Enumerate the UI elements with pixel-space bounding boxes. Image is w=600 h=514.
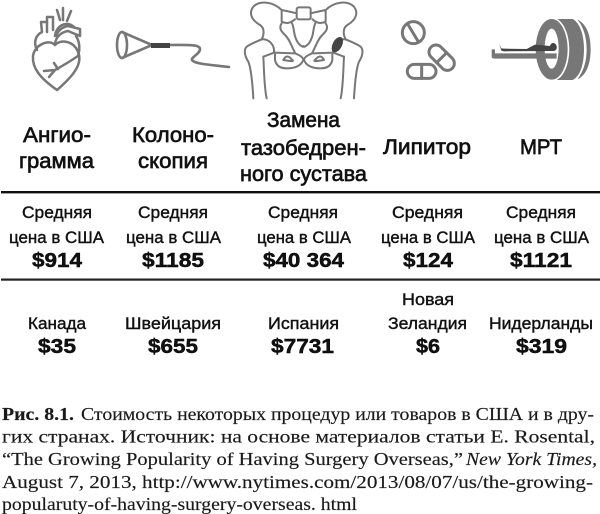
caption: Стоимость некоторых процедур или товаров в США и в дру-: [81, 404, 594, 424]
icon: heart: [33, 8, 80, 90]
US price: MRI: $1121: [510, 249, 572, 272]
US price: MRI: цена в США: [494, 229, 589, 247]
icon: pills: [402, 22, 457, 78]
US price: colonoscopy: [126, 204, 221, 272]
US price: hip replacement: Средняя: [268, 204, 338, 222]
caption: “The Growing Popularity of Having Surgery Overseas,”: [2, 449, 463, 469]
foreign price: Canada: Канада: [28, 315, 87, 333]
foreign price: Spain: $7731: [271, 335, 334, 358]
US price: lipitor: Средняя: [392, 204, 463, 222]
heading: angiogram: Ангио-: [23, 124, 91, 147]
foreign price: Netherlands: [489, 315, 593, 358]
caption: гих странах. Источник: на основе материалов статьи E. Rosental,: [2, 426, 595, 446]
US price: colonoscopy: $1185: [142, 249, 204, 272]
foreign price: Switzerland: Швейцария: [125, 315, 221, 333]
US price: colonoscopy: цена в США: [126, 229, 221, 247]
US price: lipitor: цена в США: [381, 229, 475, 247]
icon: colonoscope: [117, 32, 229, 67]
heading: colonoscopy: Колоно-: [132, 124, 214, 147]
heading: MRI: МРТ: [520, 136, 562, 159]
heading: angiogram: грамма: [19, 150, 94, 173]
US price: hip replacement: $40 364: [263, 249, 345, 272]
US price: lipitor: [381, 204, 475, 272]
US price: angiogram: цена в США: [9, 229, 104, 247]
US price: angiogram: $914: [32, 249, 83, 272]
US price: angiogram: [9, 204, 104, 272]
US price: colonoscopy: Средняя: [138, 204, 208, 222]
foreign price: Switzerland: [125, 315, 221, 358]
heading: colonoscopy: скопия: [138, 150, 208, 173]
foreign price: Canada: $35: [38, 335, 76, 358]
foreign price: New Zealand: [388, 291, 467, 358]
foreign price: New Zealand: Зеландия: [388, 315, 467, 333]
heading: angiogram: [19, 124, 94, 173]
icon: pelvis: [245, 3, 362, 98]
heading: hip replacement: [240, 109, 367, 186]
US price: hip replacement: цена в США: [257, 229, 351, 247]
heading: colonoscopy: [132, 124, 214, 173]
foreign price: Netherlands: Нидерланды: [489, 315, 593, 333]
US price: angiogram: Средняя: [22, 204, 92, 222]
caption: popularuty-of-having-surgery-overseas. html: [2, 494, 357, 514]
US price: MRI: Средняя: [506, 204, 576, 222]
foreign price: Netherlands: $319: [516, 335, 567, 358]
heading: hip replacement: ного сустава: [240, 163, 367, 186]
US price: MRI: [494, 204, 589, 272]
caption: August 7, 2013, http://www.nytimes.com/2013/08/07/us/the-growing-: [2, 472, 593, 492]
heading: lipitor: Липитор: [383, 136, 471, 159]
icon: MRI scanner: [492, 17, 591, 81]
foreign price: New Zealand: $6: [416, 335, 440, 358]
foreign price: Spain: [268, 315, 339, 358]
caption: New York Times,: [465, 449, 597, 469]
heading: hip replacement: Замена: [267, 109, 340, 132]
foreign price: New Zealand: Новая: [402, 291, 454, 309]
foreign price: Switzerland: $655: [148, 335, 198, 358]
US price: hip replacement: [257, 204, 351, 272]
foreign price: Spain: Испания: [268, 315, 339, 333]
caption: [2, 404, 597, 514]
heading: hip replacement: тазобедрен-: [241, 137, 366, 160]
foreign price: Canada: [28, 315, 87, 358]
caption: Рис. 8.1.: [2, 404, 74, 424]
US price: lipitor: $124: [403, 249, 454, 272]
